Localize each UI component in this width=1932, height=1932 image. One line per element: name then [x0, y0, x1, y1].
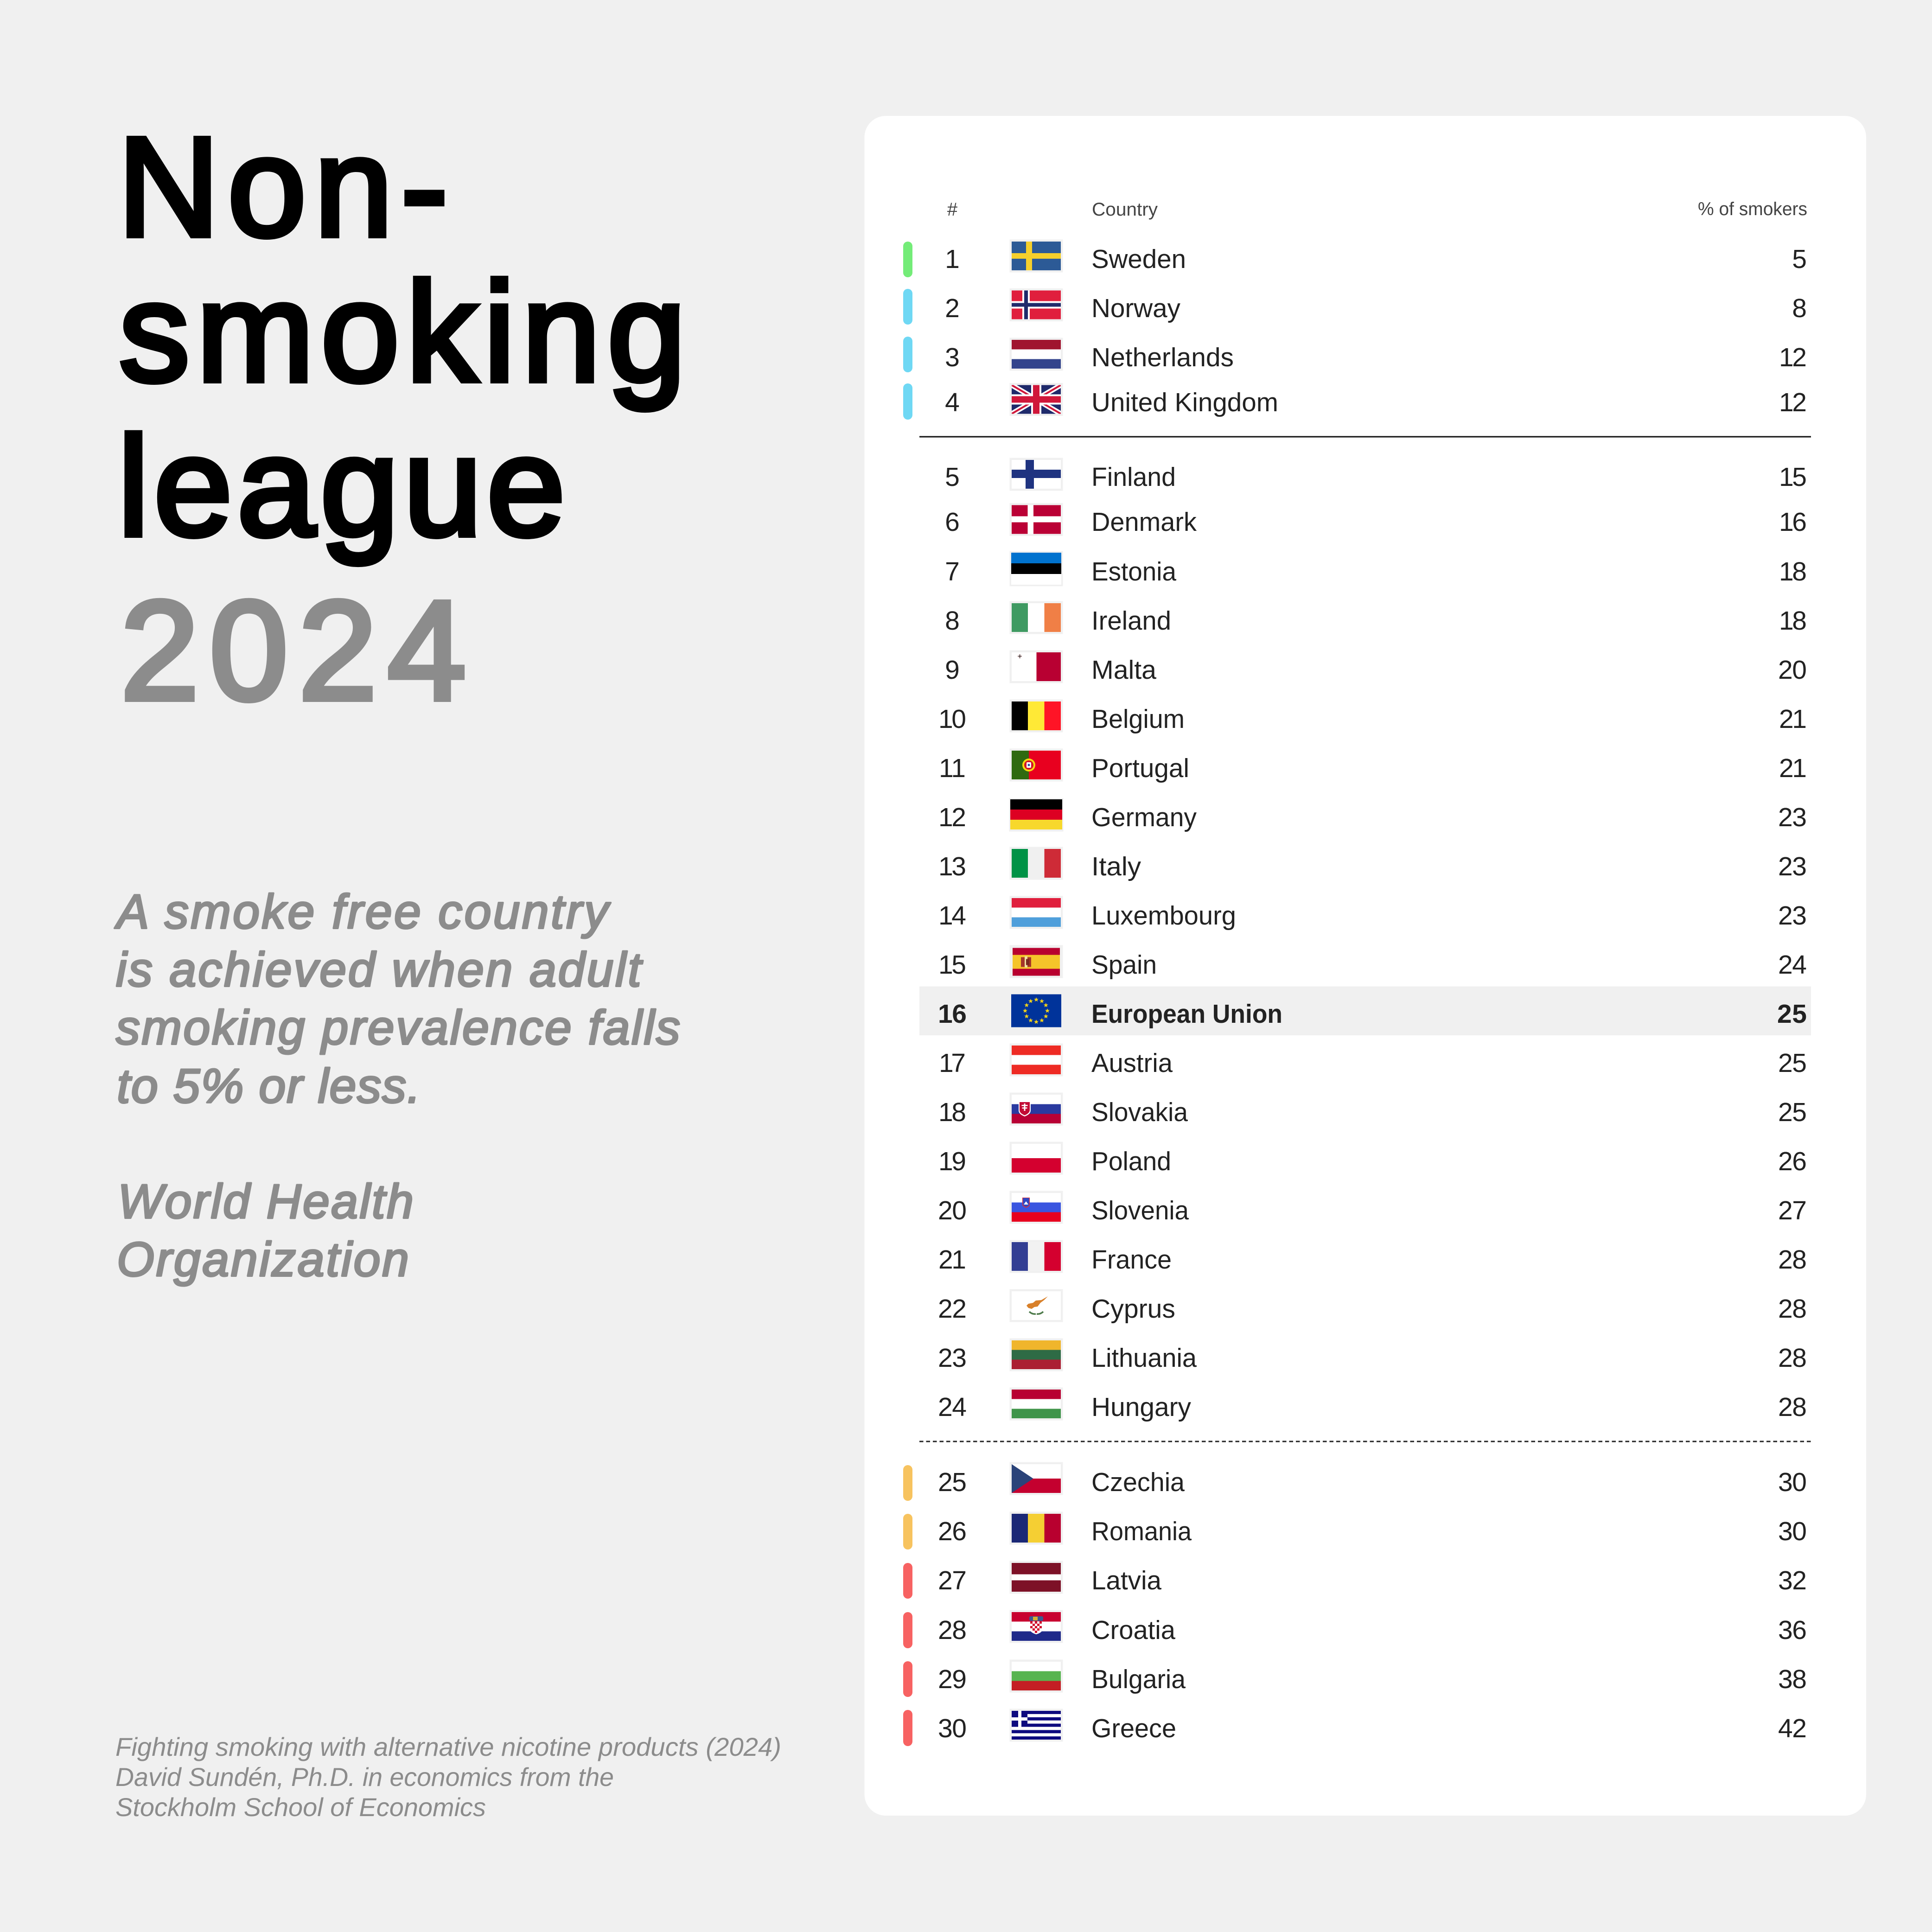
row: Netherlands: Netherlands	[1091, 343, 1234, 372]
row: Slovenia: 20	[938, 1196, 967, 1225]
row: Slovenia: 27	[1778, 1196, 1807, 1225]
row: Italy: 13	[938, 852, 966, 881]
row: Bulgaria	[903, 1660, 1807, 1697]
row: Poland	[938, 1141, 1807, 1176]
row: Cyprus: 28	[1778, 1294, 1807, 1324]
row: Croatia	[903, 1610, 1807, 1648]
row: France: 21	[938, 1245, 966, 1275]
row: Finland: 15	[1779, 462, 1807, 492]
row: Croatia: 36	[1778, 1615, 1807, 1645]
row: Austria	[939, 1043, 1807, 1078]
row: Greece: 30	[938, 1714, 967, 1743]
row: Portugal: Portugal	[1091, 753, 1189, 783]
row: Netherlands: 12	[1779, 343, 1807, 372]
source citation: Stockholm School of Economics	[115, 1792, 486, 1822]
row: Luxembourg	[938, 896, 1807, 931]
quote text: to 5% or less.	[117, 1059, 421, 1113]
row: Czechia: 25	[938, 1467, 967, 1497]
row: Poland: 26	[1778, 1147, 1807, 1176]
row: Denmark: Denmark	[1091, 507, 1197, 537]
row: Bulgaria: 29	[938, 1664, 967, 1694]
row: Slovakia: 18	[938, 1097, 966, 1127]
row: Lithuania: 28	[1778, 1343, 1807, 1373]
row: Croatia: Croatia	[1091, 1615, 1175, 1645]
quote text	[114, 885, 680, 1287]
row: Greece: Greece	[1091, 1714, 1176, 1743]
row: Czechia: Czechia	[1091, 1467, 1185, 1497]
row: Ireland	[945, 601, 1807, 636]
row: Cyprus	[938, 1289, 1807, 1324]
quote text: Organization	[117, 1233, 409, 1287]
row: Belgium: 10	[938, 704, 966, 734]
row: European Union (highlighted): European Union	[1091, 999, 1282, 1029]
row: Slovakia: 25	[1778, 1097, 1807, 1127]
row: Luxembourg: 14	[938, 901, 966, 931]
panel: league table	[864, 116, 1866, 1816]
row: Hungary: 28	[1778, 1392, 1807, 1422]
row: Sweden	[903, 239, 1807, 277]
table header: % of smokers	[1698, 199, 1807, 219]
row: Belgium: 21	[1779, 704, 1807, 734]
row: Romania: 30	[1778, 1517, 1807, 1546]
row: France: 28	[1778, 1245, 1807, 1275]
row: Greece: 42	[1778, 1714, 1807, 1743]
row: Slovenia: Slovenia	[1091, 1196, 1189, 1225]
row: Latvia: Latvia	[1091, 1566, 1161, 1595]
title: league	[118, 408, 565, 566]
row: Romania: 26	[938, 1517, 967, 1546]
row: Poland: Poland	[1091, 1147, 1171, 1176]
row: Malta	[945, 650, 1807, 685]
quote text: World Health	[118, 1175, 414, 1229]
row: Germany: 23	[1778, 803, 1807, 832]
row: Finland	[945, 458, 1807, 492]
row: Luxembourg: Luxembourg	[1091, 901, 1236, 931]
row: Netherlands: 3	[945, 343, 960, 372]
row: Bulgaria: 38	[1778, 1664, 1807, 1694]
row: United Kingdom	[903, 383, 1807, 420]
row: France: France	[1091, 1245, 1172, 1275]
table header: #	[947, 199, 958, 220]
row: Estonia: 7	[945, 557, 960, 587]
row: Spain	[938, 945, 1807, 980]
source citation: David Sundén, Ph.D. in economics from the	[115, 1762, 614, 1792]
row: Austria: 25	[1778, 1048, 1807, 1078]
title	[118, 108, 686, 729]
row: Austria: 17	[939, 1048, 966, 1078]
row: Romania: Romania	[1091, 1517, 1192, 1546]
row: Denmark	[945, 503, 1807, 537]
row: Romania	[903, 1511, 1807, 1549]
row: Bulgaria: Bulgaria	[1091, 1664, 1186, 1694]
row: Greece	[903, 1709, 1807, 1746]
table header	[947, 199, 1807, 220]
row: Latvia: 32	[1778, 1566, 1807, 1595]
row: United Kingdom: United Kingdom	[1091, 388, 1278, 417]
row: Cyprus: Cyprus	[1091, 1294, 1175, 1324]
row: Hungary: Hungary	[1091, 1392, 1191, 1422]
row: Italy: 23	[1778, 852, 1807, 881]
row: Germany: Germany	[1091, 803, 1197, 832]
row: Slovenia	[938, 1191, 1807, 1225]
row: Estonia: Estonia	[1091, 557, 1176, 587]
row: Denmark: 6	[945, 507, 960, 537]
row: Finland: Finland	[1091, 462, 1176, 492]
row: Czechia	[903, 1462, 1807, 1501]
row: Estonia: 18	[1779, 557, 1807, 587]
row: Sweden: Sweden	[1091, 244, 1186, 274]
row: Slovakia: Slovakia	[1091, 1097, 1188, 1127]
row: Croatia: 28	[938, 1615, 967, 1645]
row: Lithuania: 23	[938, 1343, 967, 1373]
row: European Union (highlighted): 16	[938, 999, 967, 1029]
row: Spain: Spain	[1091, 950, 1157, 980]
row: Germany	[938, 798, 1807, 832]
title: Non-	[118, 108, 448, 266]
row: Portugal: 11	[939, 753, 966, 783]
row: Sweden: 1	[945, 244, 960, 274]
row: Norway	[903, 288, 1807, 325]
row: Hungary	[938, 1387, 1807, 1422]
row: Hungary: 24	[938, 1392, 967, 1422]
row: Sweden: 5	[1792, 244, 1807, 274]
row: Ireland: Ireland	[1091, 606, 1171, 636]
quote text: smoking prevalence falls	[116, 1001, 680, 1055]
quote text: A smoke free country	[114, 885, 611, 939]
row: Germany: 12	[938, 803, 966, 832]
row: European Union (highlighted)	[938, 994, 1807, 1029]
row: Portugal: 21	[1779, 753, 1807, 783]
row: Malta: 20	[1778, 655, 1807, 685]
row: United Kingdom: 12	[1779, 388, 1807, 417]
row: Austria: Austria	[1091, 1048, 1173, 1078]
row: Slovakia	[938, 1092, 1807, 1127]
row: Lithuania: Lithuania	[1091, 1343, 1197, 1373]
row: Denmark: 16	[1779, 507, 1807, 537]
row: Malta: 9	[945, 655, 960, 685]
row: Estonia	[945, 551, 1807, 587]
row: Luxembourg: 23	[1778, 901, 1807, 931]
row: United Kingdom: 4	[945, 388, 960, 417]
row: Cyprus: 22	[938, 1294, 967, 1324]
row: Latvia	[903, 1561, 1807, 1599]
row: Norway: 2	[945, 293, 960, 323]
highlight band: European Union	[919, 987, 1811, 1035]
row: Poland: 19	[938, 1147, 966, 1176]
row: Norway: 8	[1792, 293, 1807, 323]
row: Italy	[938, 847, 1807, 881]
row: Italy: Italy	[1091, 852, 1141, 881]
row: European Union (highlighted): 25	[1777, 999, 1807, 1029]
row: Belgium: Belgium	[1091, 704, 1185, 734]
table header: Country	[1092, 199, 1158, 220]
row: Portugal	[939, 748, 1807, 783]
row: Finland: 5	[945, 462, 960, 492]
title: 2024	[121, 572, 466, 729]
source citation: Fighting smoking with alternative nicotine products (2024)	[115, 1732, 781, 1761]
row: Norway: Norway	[1091, 293, 1180, 323]
title: smoking	[119, 254, 686, 412]
row: Czechia: 30	[1778, 1467, 1807, 1497]
row: Malta: Malta	[1091, 655, 1156, 685]
row: Ireland: 18	[1779, 606, 1807, 636]
row: Belgium	[938, 699, 1807, 734]
source citation	[115, 1732, 781, 1822]
quote text: is achieved when adult	[116, 943, 643, 997]
row: Latvia: 27	[938, 1566, 967, 1595]
row: Spain: 24	[1778, 950, 1807, 980]
row: Lithuania	[938, 1338, 1807, 1373]
row: Spain: 15	[938, 950, 966, 980]
row: France	[938, 1240, 1807, 1275]
row: Netherlands	[903, 337, 1807, 372]
row: Ireland: 8	[945, 606, 960, 636]
